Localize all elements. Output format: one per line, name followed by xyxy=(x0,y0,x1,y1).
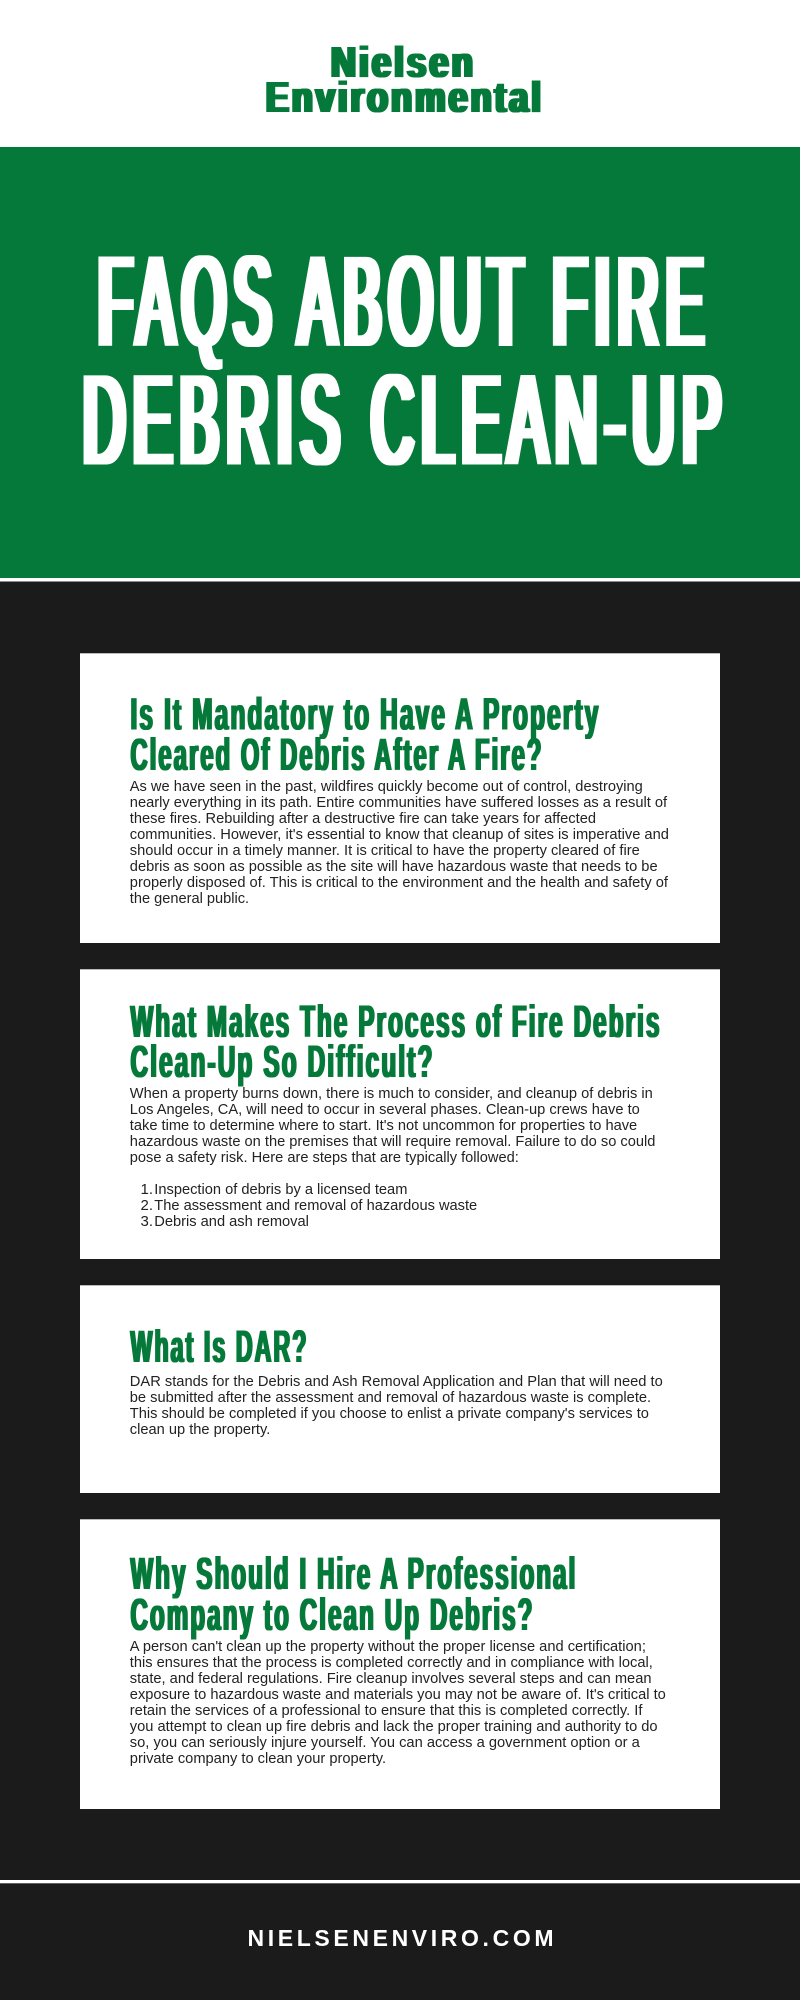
body text: why clean-up is difficult: Los Angeles, CA, will need to occur in several phases. Clean-up crews have to xyxy=(130,1101,640,1118)
numbered list of steps: 3. xyxy=(140,1213,153,1230)
body text: why clean-up is difficult xyxy=(130,1085,655,1166)
body text: hiring a professional xyxy=(130,1638,666,1767)
numbered list of steps xyxy=(140,1181,477,1230)
footer website: NIELSENENVIRO.COM xyxy=(248,1925,554,1951)
body text: mandatory clearing: As we have seen in the past, wildfires quickly become out of control, destroying xyxy=(130,778,643,795)
numbered list of steps: 2. xyxy=(140,1197,153,1214)
body text: what is DAR: DAR stands for the Debris and Ash Removal Application and Plan that will need to xyxy=(130,1373,663,1390)
body text: mandatory clearing: these fires. Rebuilding after a destructive fire can take years for affected xyxy=(130,810,596,827)
body text: why clean-up is difficult: When a property burns down, there is much to consider, and cleanup of debris in xyxy=(130,1085,653,1102)
body text: what is DAR: be submitted after the assessment and removal of hazardous waste is complete. xyxy=(130,1389,651,1406)
body text: mandatory clearing: should occur in a timely manner. It is critical to have the property cleared of fire xyxy=(130,842,640,859)
body text: mandatory clearing xyxy=(130,778,669,907)
body text: mandatory clearing: debris as soon as possible as the site will have hazardous waste that needs to be xyxy=(130,858,658,875)
footer divider xyxy=(0,1880,800,1883)
body text: why clean-up is difficult: take time to determine where to start. It's not uncommon for properties to have xyxy=(130,1117,637,1134)
panel: why clean-up is difficult xyxy=(80,969,720,1259)
numbered list of steps: Inspection of debris by a licensed team xyxy=(154,1181,407,1198)
body text: hiring a professional: you attempt to clean up fire debris and lack the proper training and authority to do xyxy=(130,1718,658,1735)
body text: why clean-up is difficult: hazardous waste on the premises that will require removal. Failure to do so could xyxy=(130,1133,655,1150)
body text: why clean-up is difficult: pose a safety risk. Here are steps that are typically followed: xyxy=(130,1149,519,1166)
logo header panel xyxy=(0,0,800,147)
title xyxy=(83,230,729,492)
body text: mandatory clearing: properly disposed of. This is critical to the environment and the health and safety of xyxy=(130,874,669,891)
white divider xyxy=(0,578,800,582)
body text: what is DAR: clean up the property. xyxy=(130,1421,270,1438)
body text: mandatory clearing: nearly everything in its path. Entire communities have suffered losses as a result of xyxy=(130,794,668,811)
body text: mandatory clearing: the general public. xyxy=(130,890,249,907)
logo wordmark: Nielsen xyxy=(331,39,476,87)
body text: hiring a professional: retain the services of a professional to ensure that this is completed correctly. If xyxy=(130,1702,643,1719)
title banner xyxy=(0,147,800,578)
body text: hiring a professional: exposure to hazardous waste and materials you may not be aware of. It's critical to xyxy=(130,1686,666,1703)
body text: what is DAR xyxy=(130,1373,663,1438)
heading: hiring a professional xyxy=(130,1548,578,1640)
heading: why clean-up is difficult xyxy=(130,996,662,1087)
body text: what is DAR: This should be completed if you choose to enlist a private company's services to xyxy=(130,1405,649,1422)
panel: mandatory clearing xyxy=(80,653,720,943)
heading: why clean-up is difficult: Clean-Up So Difficult? xyxy=(130,1036,434,1087)
body text: hiring a professional: A person can't clean up the property without the proper license and certification; xyxy=(130,1638,646,1655)
heading: mandatory clearing xyxy=(130,688,600,780)
panel: what is DAR xyxy=(80,1285,720,1493)
body text: hiring a professional: so, you can seriously injure yourself. You can access a government option or a xyxy=(130,1734,640,1751)
logo wordmark xyxy=(266,39,544,122)
numbered list of steps: Debris and ash removal xyxy=(154,1213,309,1230)
logo wordmark: Environmental xyxy=(266,74,544,122)
panel: hiring a professional xyxy=(80,1519,720,1809)
body text: hiring a professional: private company to clean your property. xyxy=(130,1750,386,1767)
numbered list of steps: 1. xyxy=(140,1181,153,1198)
heading: what is DAR: What Is DAR? xyxy=(130,1321,308,1372)
body text: hiring a professional: state, and federal regulations. Fire cleanup involves several steps and can mean xyxy=(130,1670,652,1687)
body text: hiring a professional: this ensures that the process is completed correctly and in compliance with local, xyxy=(130,1654,653,1671)
body text: mandatory clearing: communities. However, it's essential to know that cleanup of sites is imperative and xyxy=(130,826,669,843)
numbered list of steps: The assessment and removal of hazardous waste xyxy=(154,1197,477,1214)
dark content background xyxy=(0,582,800,2000)
